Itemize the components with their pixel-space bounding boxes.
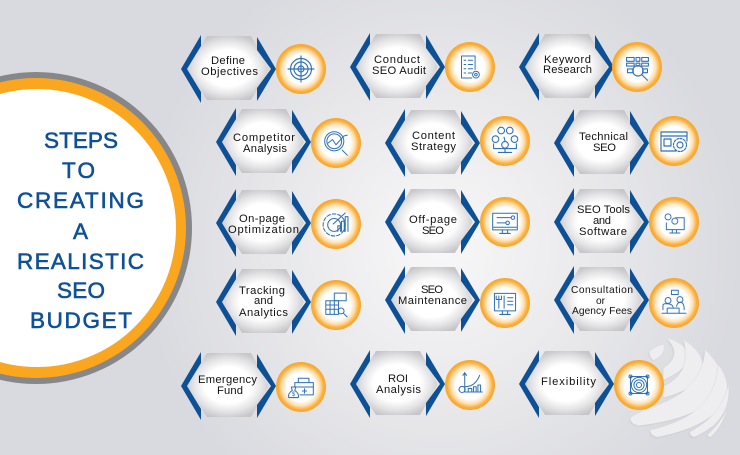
icon: browser with gear <box>649 116 699 166</box>
icon: magnifier with trend line <box>311 118 361 168</box>
icon: target <box>276 44 326 94</box>
step: Conduct SEO Audit: Conduct <box>374 54 421 66</box>
globe watermark <box>630 338 729 437</box>
step: ROI Analysis: Analysis <box>376 384 421 396</box>
title text: CREATING <box>17 188 144 213</box>
title text: REALISTIC <box>17 249 144 274</box>
icon: flexible frame <box>614 360 664 410</box>
step: Emergency Fund <box>181 352 326 420</box>
title text: SEO <box>57 278 105 303</box>
step: Emergency Fund: Fund <box>217 385 243 397</box>
step: SEO Tools and Software: and <box>593 215 611 227</box>
step: On-page Optimization: On-page <box>239 213 285 225</box>
step: Define Objectives <box>181 35 326 103</box>
step: Define Objectives: Define <box>211 55 245 67</box>
icon: money bag and first aid case <box>276 362 326 412</box>
step: ROI Analysis <box>350 350 495 418</box>
step: Content Strategy: Strategy <box>411 141 456 153</box>
title text: A <box>73 219 88 244</box>
title badge <box>0 72 192 384</box>
step: Off-page SEO: SEO <box>422 225 444 237</box>
step: Keyword Research: Research <box>543 64 592 76</box>
icon: consultation at a desk <box>649 278 699 328</box>
step: Competitor Analysis <box>216 108 361 176</box>
step: SEO Maintenance: Maintenance <box>398 295 467 307</box>
step: On-page Optimization: Optimization <box>228 224 299 236</box>
icon: monitor with gears <box>649 197 699 247</box>
step: SEO Maintenance <box>385 266 530 334</box>
step: SEO Tools and Software: SEO Tools <box>577 204 630 216</box>
icon: gear with growth chart <box>311 199 361 249</box>
step: Content Strategy <box>385 109 530 177</box>
step: SEO Tools and Software: Software <box>579 226 627 238</box>
icon: money bag and first aid case: $ <box>292 391 296 398</box>
step: Define Objectives: Objectives <box>201 66 258 78</box>
step: Tracking and Analytics: Analytics <box>239 307 288 319</box>
step: SEO Maintenance: SEO <box>421 284 443 296</box>
step: Technical SEO: Technical <box>579 131 628 143</box>
step: Competitor Analysis: Analysis <box>243 143 287 155</box>
step: Conduct SEO Audit <box>350 33 495 101</box>
step: ROI Analysis: ROI <box>388 373 408 385</box>
icon: ROI growth chart <box>445 360 495 410</box>
title text <box>17 128 144 333</box>
title text: STEPS <box>44 128 118 153</box>
step: Flexibility: Flexibility <box>541 376 596 388</box>
step: Consultation or Agency Fees: Consultation <box>571 285 633 296</box>
step: Off-page SEO <box>385 188 530 256</box>
icon: keyword search <box>612 42 662 92</box>
step: Tracking and Analytics <box>216 268 361 336</box>
step: Flexibility <box>519 350 664 418</box>
title text: TO <box>62 158 95 183</box>
step: Conduct SEO Audit: SEO Audit <box>372 65 427 77</box>
step: Tracking and Analytics: Tracking <box>239 285 285 297</box>
icon: audit checklist <box>445 42 495 92</box>
step: On-page Optimization <box>216 189 361 257</box>
step: Consultation or Agency Fees <box>554 266 699 334</box>
step: Keyword Research: Keyword <box>544 54 591 66</box>
step: Consultation or Agency Fees: or <box>596 296 606 307</box>
icon: monitor with sliders <box>480 197 530 247</box>
title text: BUDGET <box>30 308 132 333</box>
icon: monitor with tools <box>480 278 530 328</box>
step: Consultation or Agency Fees: Agency Fees <box>572 306 632 317</box>
step: Off-page SEO: Off-page <box>409 214 457 226</box>
step: SEO Tools and Software <box>554 188 699 256</box>
step: Emergency Fund: Emergency <box>198 374 257 386</box>
step: Technical SEO <box>554 109 699 177</box>
step: Tracking and Analytics: and <box>254 295 273 307</box>
icon: analytics dashboard <box>311 280 361 330</box>
step: Technical SEO: SEO <box>593 142 616 154</box>
step: Keyword Research <box>519 33 662 101</box>
icon: content network on monitor <box>480 116 530 166</box>
step: Content Strategy: Content <box>412 130 456 142</box>
step: Competitor Analysis: Competitor <box>233 132 295 144</box>
